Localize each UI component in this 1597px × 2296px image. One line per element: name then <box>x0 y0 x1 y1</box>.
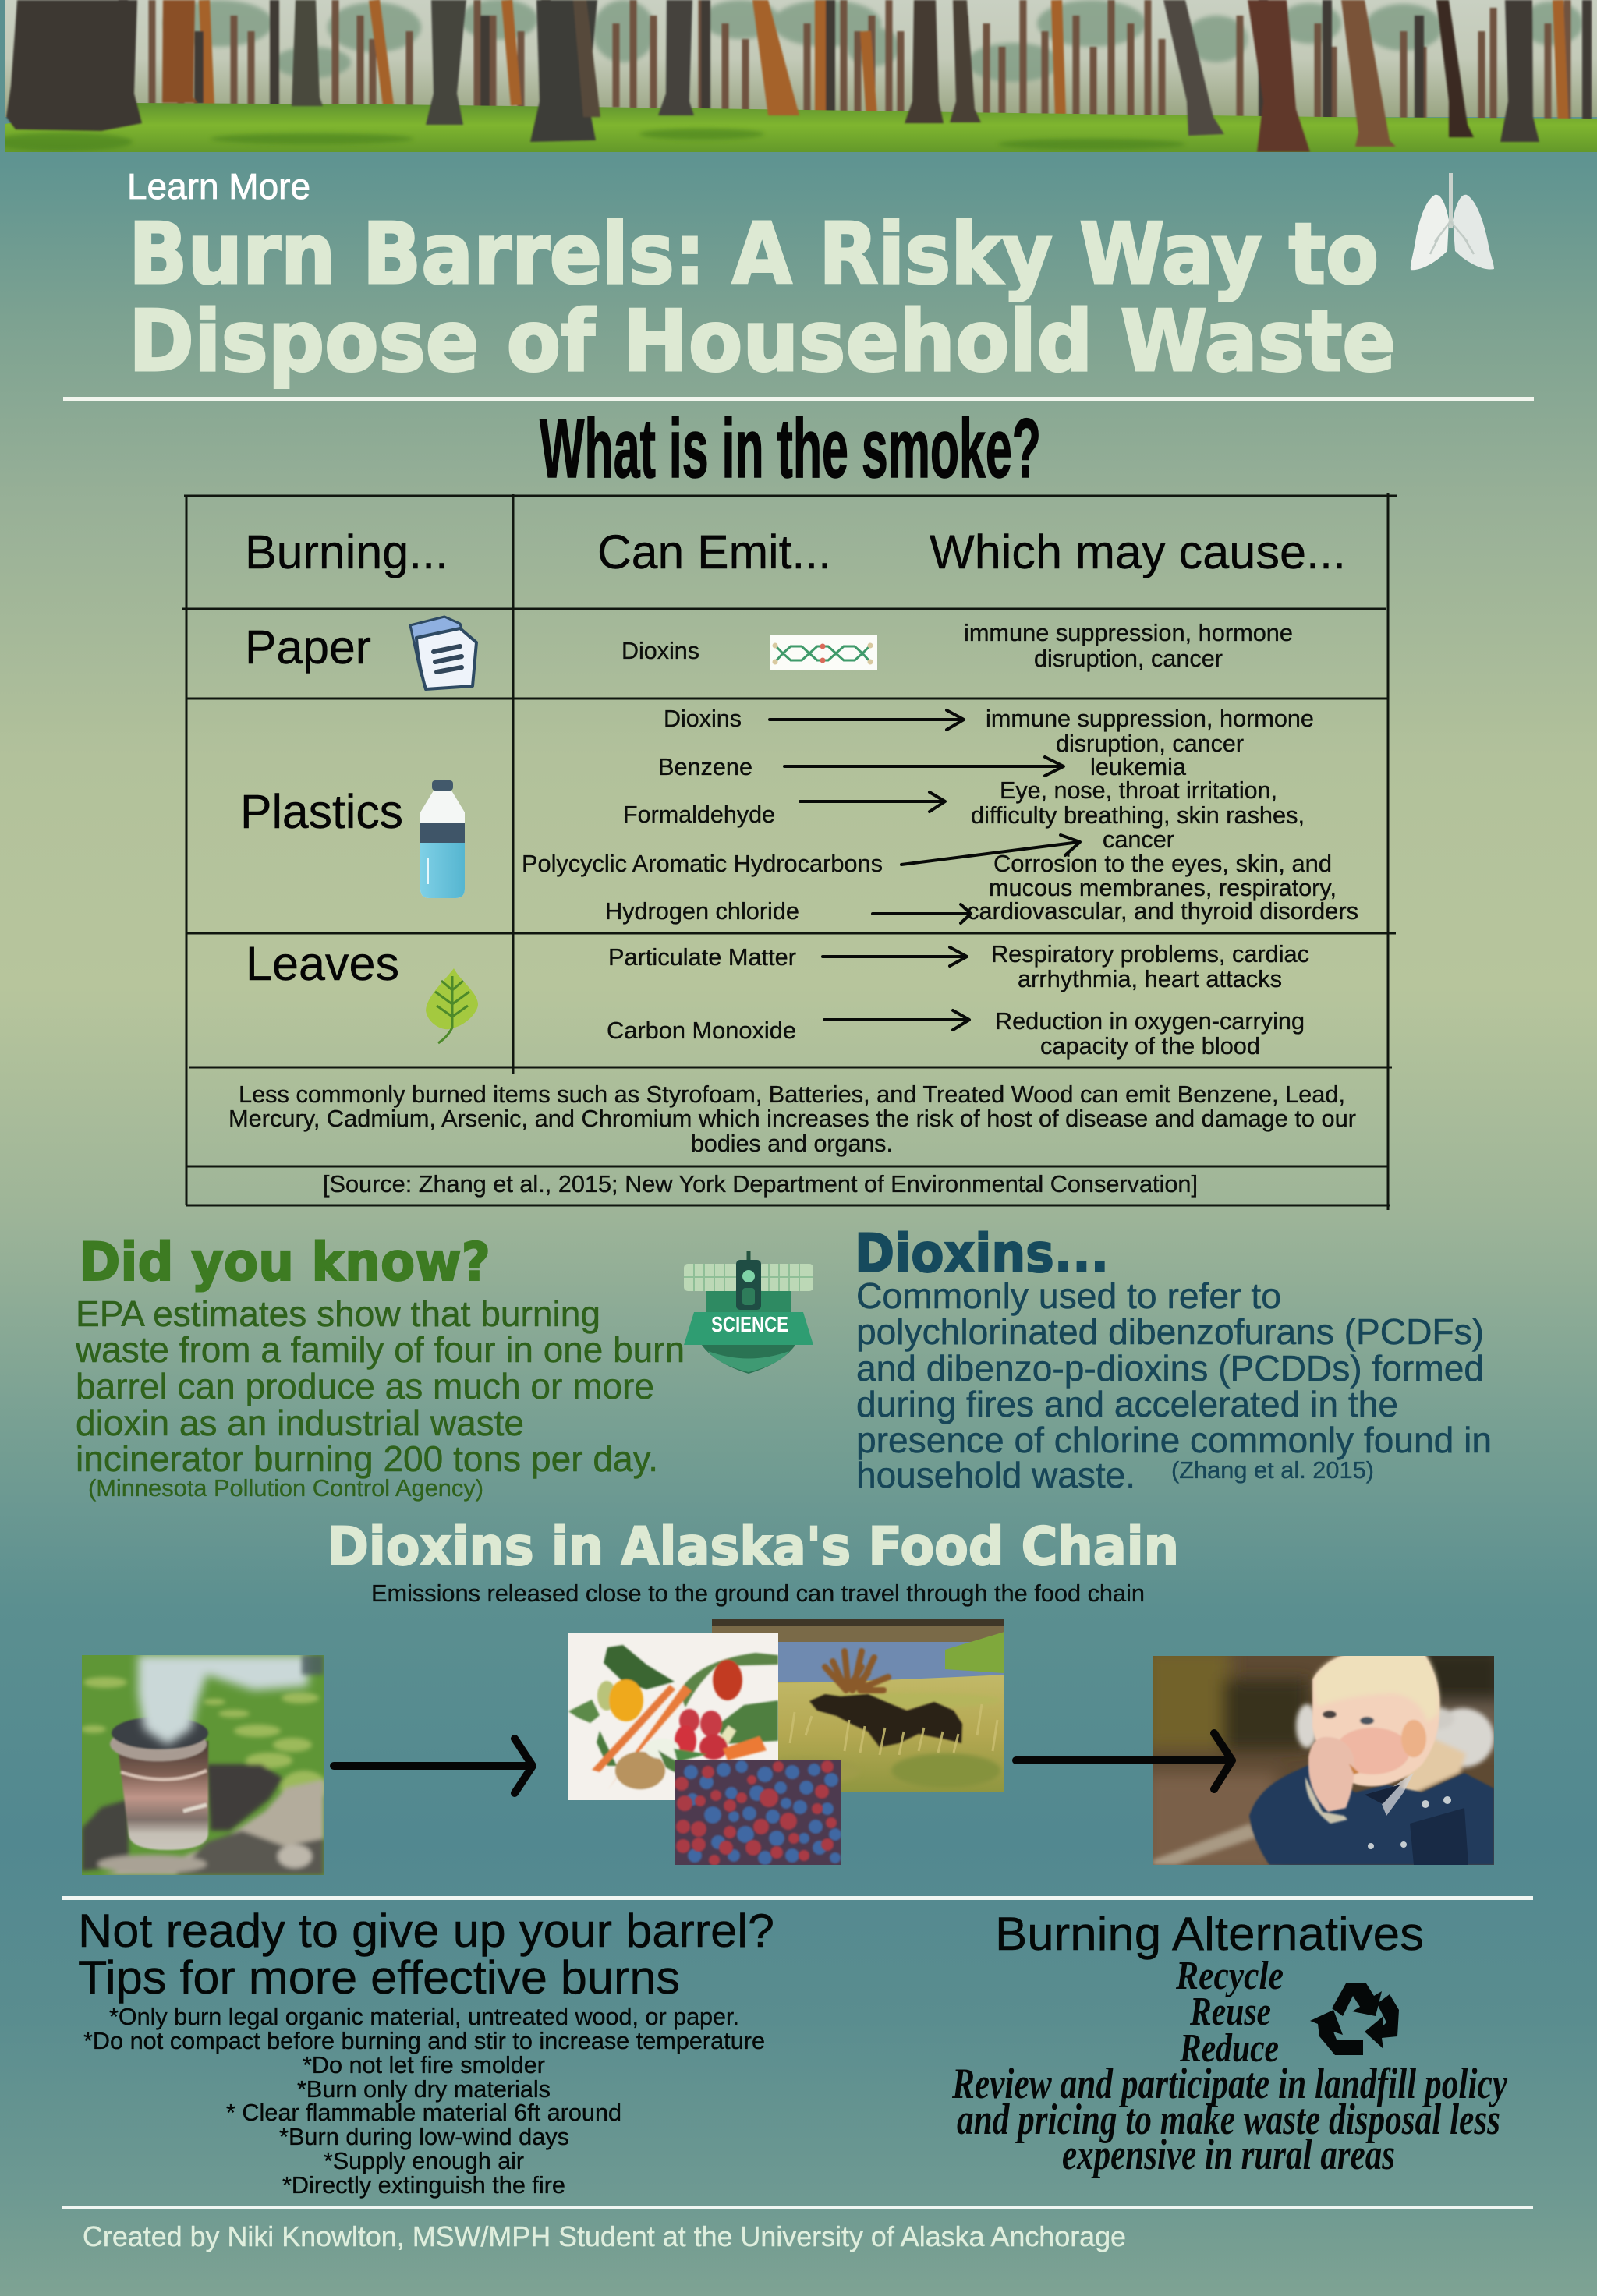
photo: toddler eating <box>1153 1656 1494 1865</box>
row: leaves: Respiratory problems, cardiac <box>991 940 1309 968</box>
photo: mixed alaskan berries <box>675 1760 841 1865</box>
text: EPA estimate: EPA estimates show that burning <box>76 1293 600 1334</box>
heading: Dioxins in Alaska's Food Chain: Dioxins in Alaska's Food Chain <box>328 1516 1179 1578</box>
row: plastics: leukemia <box>1090 753 1187 780</box>
text: less commonly burned items: Mercury, Cadmium, Arsenic, and Chromium which increases the risk of host of disease and damage to our <box>228 1105 1356 1132</box>
text: dioxins definition: household waste. <box>856 1455 1135 1495</box>
panel: tips for more effective burns <box>78 1905 774 2199</box>
heading: main title: Dispose of Household Waste <box>129 293 1396 391</box>
text: Learn More: Learn More <box>127 166 310 207</box>
list: burn tips: *Burn only dry materials <box>297 2075 551 2103</box>
row: plastics: Benzene <box>658 753 752 780</box>
list: burn tips: *Do not let fire smolder <box>303 2051 545 2078</box>
text: dioxins definition: polychlorinated dibenzofurans (PCDFs) <box>856 1311 1484 1352</box>
heading: main title: Burn Barrels: A Risky Way to <box>129 206 1379 303</box>
icon: recycling symbol <box>1310 1983 1399 2055</box>
row: plastics: difficulty breathing, skin rashes, <box>971 801 1305 829</box>
image: dioxin molecule <box>770 635 877 670</box>
photo: vegetables and fruit <box>568 1633 778 1800</box>
text: table source: [Source: Zhang et al., 2015; New York Department of Environmental Conservation] <box>323 1170 1198 1198</box>
row: plastics: Eye, nose, throat irritation, <box>1000 777 1277 804</box>
text: dioxins definition: during fires and accelerated in the <box>856 1384 1398 1424</box>
arrow: formaldehyde to effects <box>800 792 945 812</box>
text: dioxins definition <box>856 1275 1492 1495</box>
heading: tips heading: Tips for more effective burns <box>78 1951 680 2004</box>
heading: Did you know?: Did you know? <box>79 1232 490 1293</box>
row: paper: immune suppression, hormone <box>964 619 1293 646</box>
arrow: barrel to food <box>334 1739 533 1793</box>
row: leaves <box>246 937 1309 1060</box>
text: Zhang citation: (Zhang et al. 2015) <box>1171 1456 1374 1484</box>
arrow: PAH to effects <box>901 835 1080 865</box>
text: credit line: Created by Niki Knowlton, MSW/MPH Student at the University of Alaska Anchorage <box>83 2220 1126 2252</box>
row: plastics: disruption, cancer <box>1056 730 1244 757</box>
panel: burning alternatives <box>951 1908 1508 2179</box>
text: EPA estimate: waste from a family of four in one burn <box>75 1329 685 1370</box>
icon: water bottle <box>420 780 465 898</box>
text: recycle reuse reduce <box>1175 1954 1284 2071</box>
row: leaves: arrhythmia, heart attacks <box>1018 965 1282 992</box>
row: plastics: cancer <box>1103 826 1174 853</box>
icon: leaf <box>426 968 478 1043</box>
text: landfill policy <box>951 2060 1508 2179</box>
arrow: carbon monoxide to effects <box>824 1010 969 1030</box>
arrow: hydrogen chloride to effects <box>873 904 971 923</box>
list: burn tips: *Burn during low-wind days <box>279 2123 569 2150</box>
row: plastics <box>240 705 1358 925</box>
panel: dioxins definition <box>855 1223 1492 1495</box>
list: burn tips <box>83 2003 765 2199</box>
icon: paper documents <box>410 617 476 689</box>
row: plastics: Corrosion to the eyes, skin, and <box>993 850 1332 877</box>
table: what is in the smoke <box>182 493 1397 1210</box>
row: plastics: Polycyclic Aromatic Hydrocarbons <box>522 850 883 877</box>
list: burn tips: * Clear flammable material 6ft around <box>226 2099 621 2126</box>
row: plastics: Formaldehyde <box>623 801 775 828</box>
heading: tips heading <box>78 1905 774 2004</box>
icon: lungs <box>1411 173 1494 270</box>
text: EPA estimate: barrel can produce as much or more <box>76 1366 654 1406</box>
row: leaves: capacity of the blood <box>1040 1032 1260 1060</box>
photo: pine forest banner <box>5 0 1597 152</box>
row: plastics: Dioxins <box>664 705 742 732</box>
list: burn tips: *Only burn legal organic material, untreated wood, or paper. <box>109 2003 739 2030</box>
table header row: Can Emit... <box>597 525 831 578</box>
row: plastics: Plastics <box>240 785 403 838</box>
arrow: benzene to leukemia <box>784 757 1064 776</box>
row: paper: Paper <box>245 621 371 674</box>
list: burn tips: *Supply enough air <box>324 2147 524 2174</box>
row: paper: disruption, cancer <box>1034 645 1223 672</box>
heading: Dioxins...: Dioxins... <box>855 1223 1109 1285</box>
table header row <box>245 525 1346 578</box>
row: plastics: cardiovascular, and thyroid disorders <box>967 897 1358 925</box>
text: recycle reuse reduce: Reduce <box>1179 2026 1279 2071</box>
text: recycle reuse reduce: Reuse <box>1189 1990 1271 2034</box>
text: less commonly burned items: bodies and organs. <box>691 1130 893 1157</box>
text: less commonly burned items: Less commonly burned items such as Styrofoam, Batteries, and Treated Wood can emit Benzene, Lead, <box>239 1081 1345 1108</box>
text: dioxins definition: and dibenzo-p-dioxins (PCDDs) formed <box>856 1348 1484 1389</box>
text: EPA estimate <box>75 1293 685 1479</box>
row: plastics: Hydrogen chloride <box>605 897 799 925</box>
row: leaves: Carbon Monoxide <box>607 1017 796 1044</box>
panel: did you know <box>75 1232 685 1502</box>
row: paper <box>245 617 1293 689</box>
row: leaves: Leaves <box>246 937 399 990</box>
text: food chain subtitle: Emissions released close to the ground can travel through the food chain <box>371 1580 1145 1607</box>
table header row: Which may cause... <box>930 525 1346 578</box>
heading: tips heading: Not ready to give up your barrel? <box>78 1905 774 1957</box>
arrow: dioxins to effects <box>770 710 964 730</box>
row: paper: Dioxins <box>621 637 699 664</box>
heading: main title <box>129 206 1396 391</box>
heading: Burning Alternatives: Burning Alternatives <box>995 1908 1424 1960</box>
text: EPA estimate: incinerator burning 200 tons per day. <box>76 1438 658 1479</box>
text: Minnesota citation: (Minnesota Pollution Control Agency) <box>88 1474 483 1502</box>
text: dioxins definition: presence of chlorine commonly found in <box>856 1420 1492 1460</box>
heading: What is in the smoke?: What is in the smoke? <box>540 401 1041 495</box>
photo: smoking burn barrel <box>82 1655 324 1875</box>
text: recycle reuse reduce: Recycle <box>1175 1954 1284 1998</box>
arrow: particulate matter to effects <box>823 947 967 966</box>
arrow: food to child <box>1016 1733 1232 1789</box>
row: leaves: Reduction in oxygen-carrying <box>995 1007 1305 1035</box>
photo: alaskan moose in grass <box>712 1619 1004 1792</box>
icon: science badge <box>684 1251 813 1374</box>
row: leaves: Particulate Matter <box>608 943 796 971</box>
row: plastics: immune suppression, hormone <box>986 705 1314 732</box>
text: SCIENCE: SCIENCE <box>711 1312 788 1336</box>
text: landfill policy: expensive in rural areas <box>1062 2131 1395 2179</box>
list: burn tips: *Do not compact before burning and stir to increase temperature <box>83 2027 765 2054</box>
text: dioxins definition: Commonly used to refer to <box>856 1275 1281 1316</box>
list: burn tips: *Directly extinguish the fire <box>282 2171 565 2199</box>
table header row: Burning... <box>245 525 448 578</box>
text: less commonly burned items <box>228 1081 1356 1157</box>
text: EPA estimate: dioxin as an industrial waste <box>76 1403 524 1443</box>
row: plastics: mucous membranes, respiratory, <box>989 874 1337 901</box>
